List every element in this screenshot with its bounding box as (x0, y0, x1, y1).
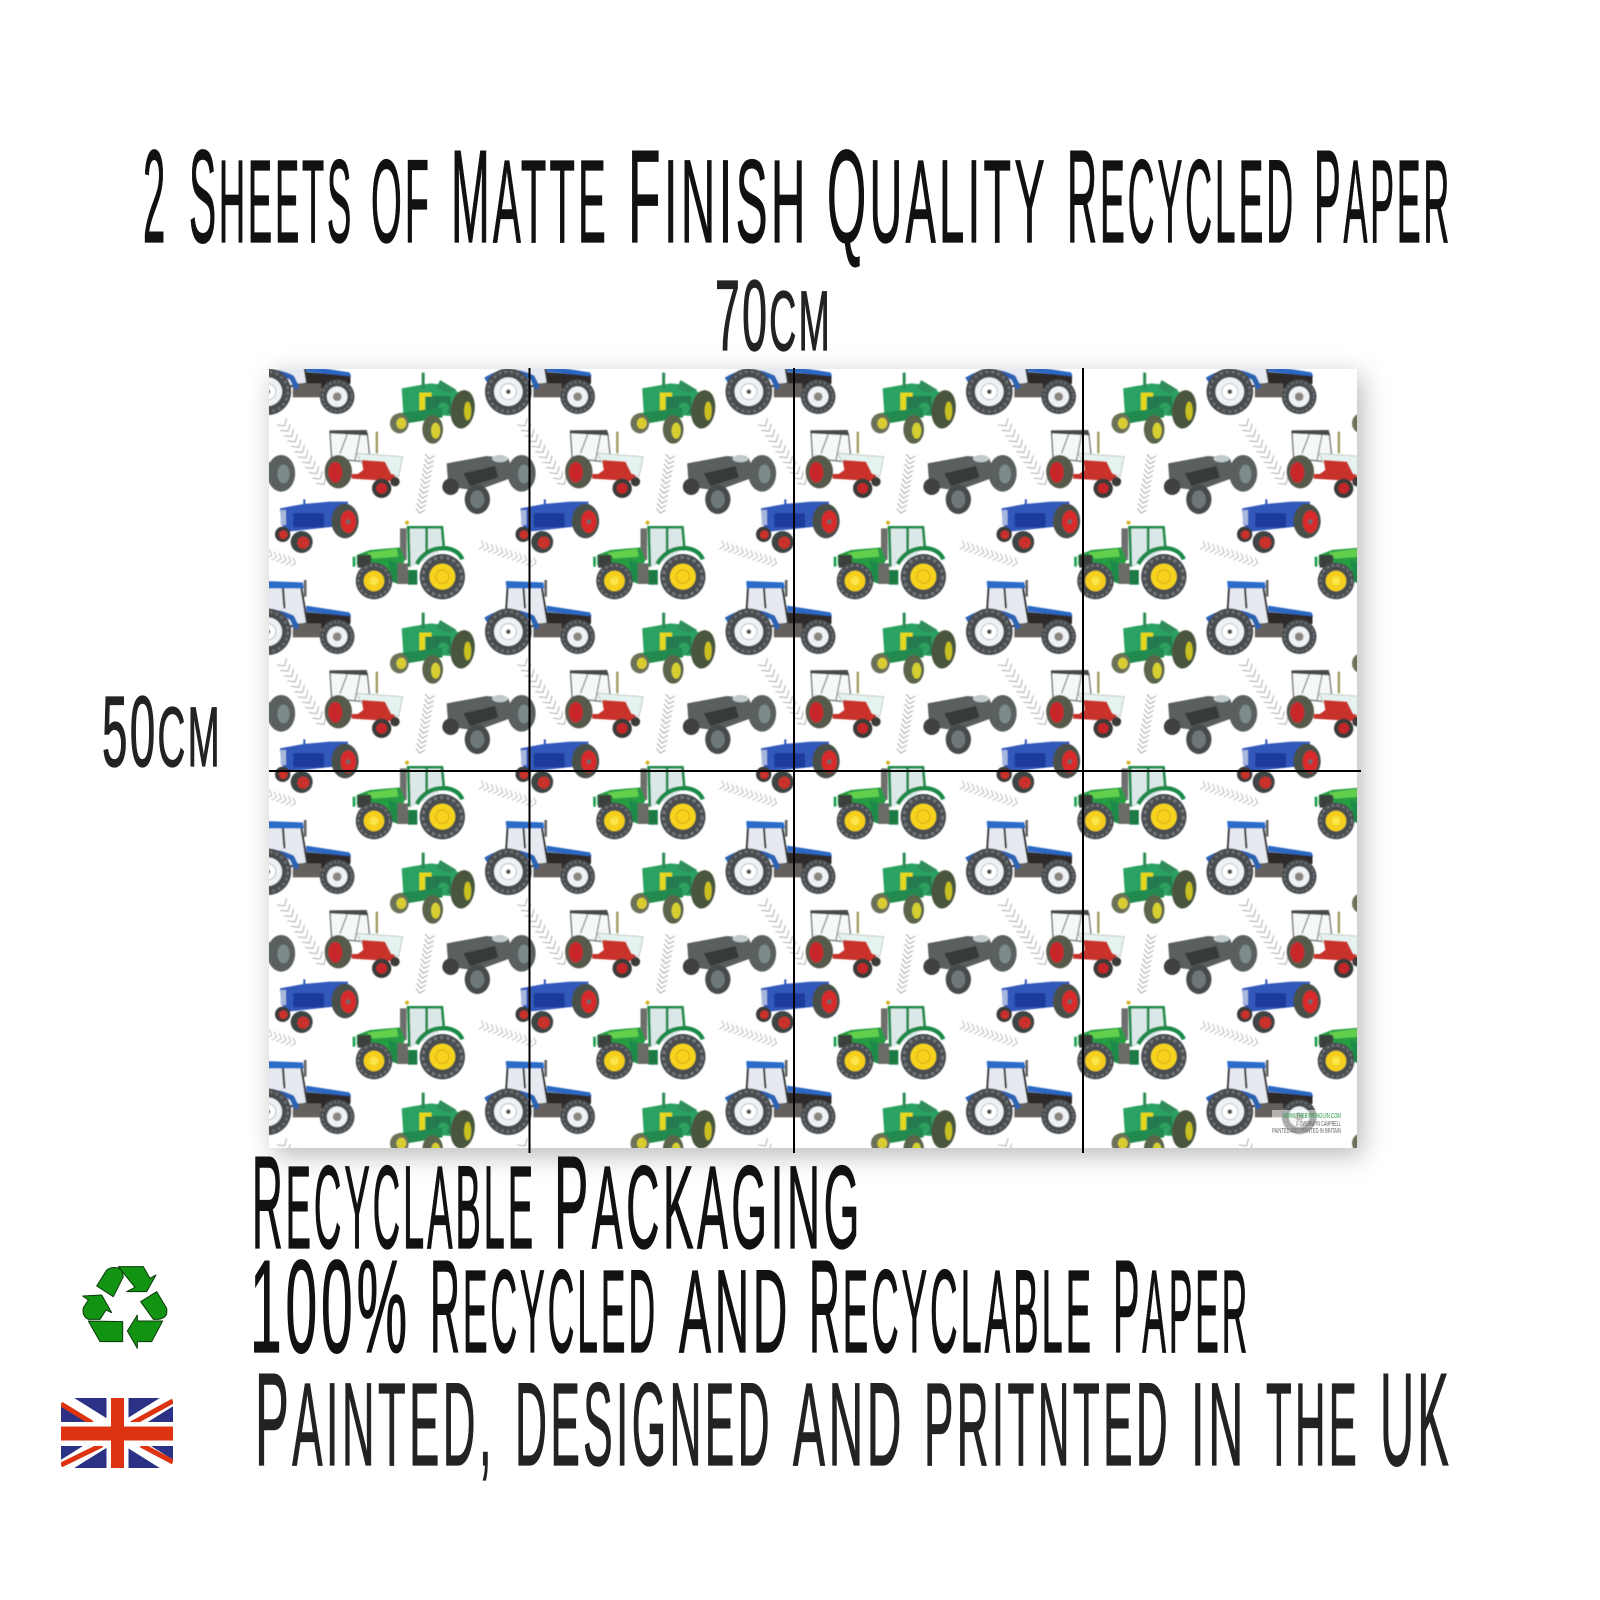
text: 100% recycled and recyclable paper: AND (679, 1246, 791, 1378)
title: QUALITY (827, 123, 1048, 270)
text: PACKAGING (554, 1129, 863, 1276)
panel: wrapping paper sheet shadow (269, 369, 1357, 1148)
width label: 70cm: 70CM (715, 260, 832, 372)
text: 100% recycled and recyclable paper: RECYCLABLE (809, 1233, 1094, 1380)
icon: UK flag (61, 1398, 173, 1468)
title (143, 123, 1452, 270)
height label: 50cm: 50CM (102, 676, 222, 788)
text: 100% recycled and recyclable paper (250, 1233, 1250, 1380)
text: painted, designed and printed in the UK: PRITNTED (924, 1359, 1171, 1491)
text: recyclable packaging: RECYCLABLE (252, 1129, 536, 1276)
watermark (1272, 1110, 1342, 1135)
text: painted, designed and printed in the UK: AND (793, 1359, 905, 1491)
text: painted, designed and printed in the UK: IN (1191, 1359, 1247, 1491)
title: OF (371, 136, 432, 268)
text: painted, designed and printed in the UK: DESIGNED (515, 1359, 773, 1491)
text: painted, designed and printed in the UK: THE (1266, 1359, 1360, 1491)
sheet fold lines (269, 368, 1361, 1153)
text: painted, designed and printed in the UK: PAINTED, (255, 1346, 495, 1493)
text: PAPER (1113, 1233, 1250, 1380)
icon: recycling symbol (83, 1267, 167, 1348)
title: MATTE (451, 123, 609, 270)
text: painted, designed and printed in the UK (255, 1346, 1452, 1493)
watermark: © GWENWYN CAMPBELL (1296, 1119, 1341, 1128)
watermark: WWW.THEBYPENGUIN.COM (1283, 1111, 1341, 1120)
title: SHEETS (189, 123, 354, 270)
watermark: PAINTED AND PRINTED IN BRITAIN (1272, 1126, 1341, 1135)
text: 100% recycled and recyclable paper: RECYCLED (430, 1233, 658, 1380)
panel: tractor wrapping paper pattern (269, 369, 1357, 1148)
text: 100% recycled and recyclable paper: 100% (250, 1233, 411, 1380)
title: 2 (143, 123, 168, 270)
title: FINISH (628, 123, 809, 270)
text: UK (1380, 1346, 1452, 1493)
